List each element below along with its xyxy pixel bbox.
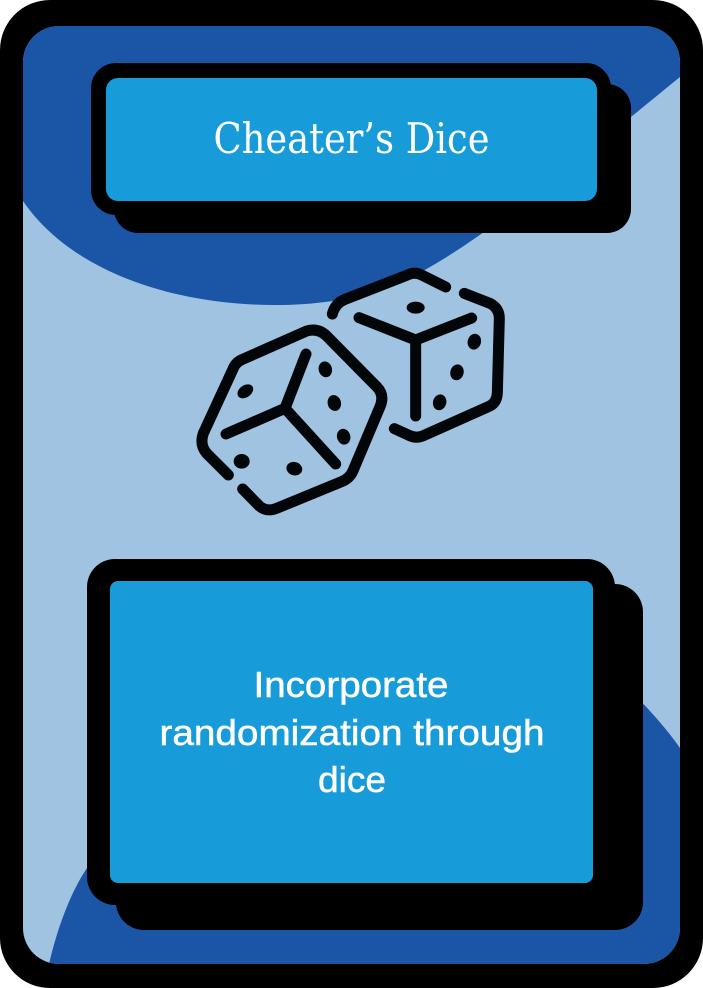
title box shadow [114,84,631,233]
description box shadow [116,584,643,930]
description box fill [110,581,593,883]
description text [160,664,544,800]
icon: left die [202,330,382,510]
heading: Cheater’s Dice [214,114,490,163]
panel: title box [91,63,631,233]
description box border [87,559,615,905]
title box border [91,63,611,215]
title box fill [106,78,597,201]
decorative top blob [23,26,680,305]
decorative bottom blob [49,704,680,964]
panel: description box [87,559,643,930]
description text: Incorporate [254,664,448,705]
icon: two dice [202,273,499,510]
icon: right die [332,273,499,437]
description text: dice [318,759,386,800]
description text: randomization through [160,712,544,753]
